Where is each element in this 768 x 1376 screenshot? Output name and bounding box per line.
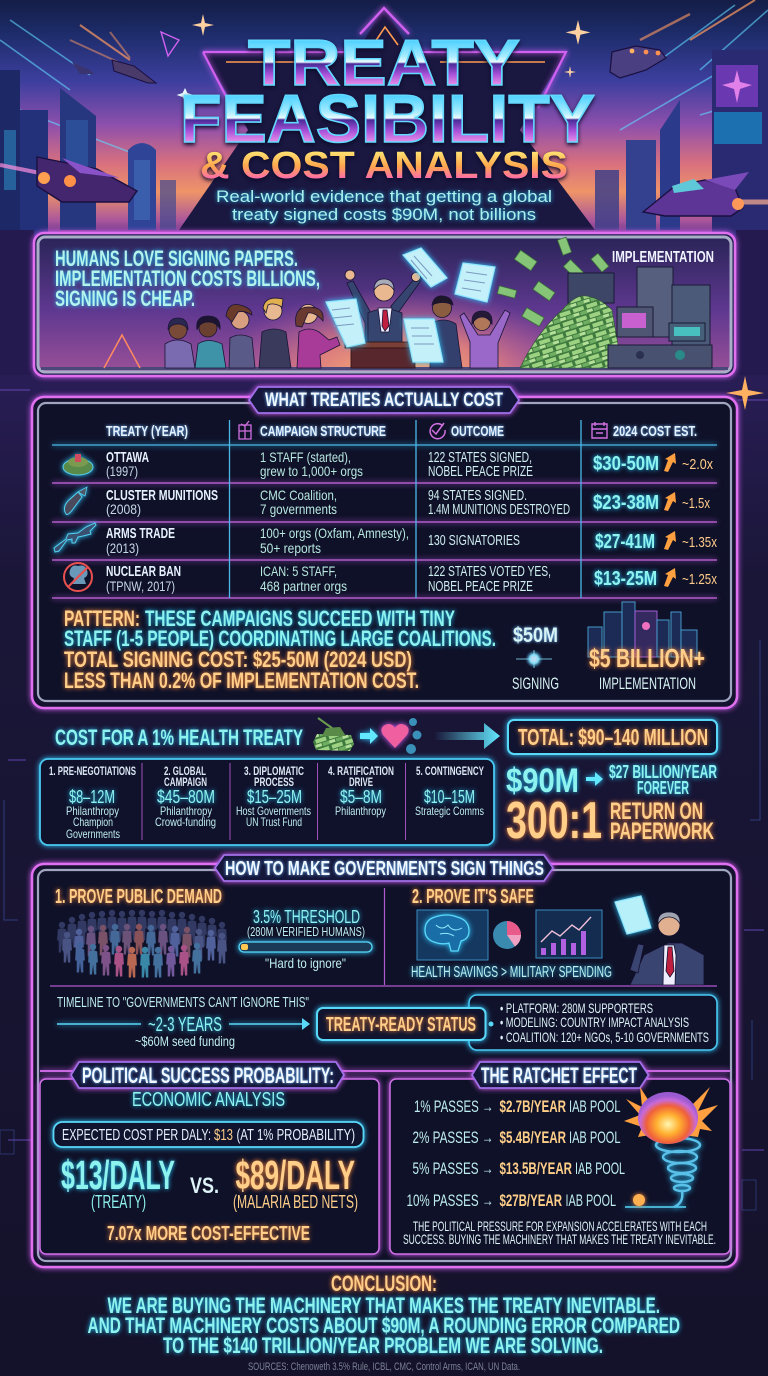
pattern callout: LESS THAN 0.2% OF IMPLEMENTATION COST. [64,668,419,693]
phase 2: global campaign: CAMPAIGN [164,775,207,789]
comparison: signing cost: SIGNING [512,674,559,693]
icon: official with document [615,896,704,985]
row: cluster munitions: 7 governments [260,501,337,517]
spaceship: left small craft [70,32,156,83]
icon: heart with pills [381,718,422,754]
phase 4: ratification drive [328,764,394,818]
heading: cost for a 1% health treaty: COST FOR A 1% HEALTH TREATY [55,725,303,750]
conclusion: CONCLUSION: [331,1271,437,1296]
panel heading [71,1062,344,1088]
pattern callout: PATTERN: [64,606,140,631]
phase 3: diplomatic process: Host Governments [236,804,311,818]
ratchet row 10% [406,1191,616,1210]
ratchet row 2%: 2% PASSES → [412,1128,494,1147]
ratchet row 1%: 1% PASSES → [414,1097,494,1116]
expected cost pill: EXPECTED COST PER DALY: [62,1127,211,1144]
benefit label: HEALTH SAVINGS > MILITARY SPENDING [411,964,612,981]
phase 1: pre-negotiations: Governments [66,827,120,841]
row: cluster munitions: CMC Coalition, [260,487,337,503]
malaria nets cost per daly: $89/DALY [236,1152,355,1198]
ratchet row 2%: IAB POOL [569,1128,620,1147]
return on investment: PAPERWORK [610,818,714,845]
pattern callout: THESE CAMPAIGNS SUCCEED WITH TINY [145,606,455,631]
row: arms trade: (2013) [106,540,139,556]
return on investment: FOREVER [637,778,689,798]
phase 1: pre-negotiations: $8–12M [69,787,115,807]
row: arms trade: 50+ reports [260,540,321,556]
section heading [249,387,519,413]
ratchet row 5%: IAB POOL [575,1159,625,1178]
phase 1: pre-negotiations [49,764,136,841]
hero headline: SIGNING IS CHEAP. [55,286,195,311]
icon: growth arrow [664,492,676,511]
row: arms trade: 100+ orgs (Oxfam, Amnesty), [260,525,409,541]
panel heading: POLITICAL SUCCESS PROBABILITY: [82,1063,334,1088]
treaty-ready status badge: TREATY-READY STATUS [326,1014,476,1036]
row: nuclear ban: NUCLEAR BAN [106,563,181,580]
ratchet row 5%: $13.5B/YEAR [500,1159,572,1178]
podium [345,342,421,368]
ratchet row 2% [412,1128,620,1147]
row: ottawa: (1997) [106,463,138,479]
panel heading: THE RATCHET EFFECT [481,1063,637,1088]
row: ottawa: 122 STATES SIGNED, [428,450,532,466]
title: treaty: TREATY [248,26,520,99]
spaceship: right top craft [610,14,690,78]
malaria nets cost per daly [233,1152,358,1212]
row: arms trade: ARMS TRADE [106,525,175,542]
total box [508,720,717,754]
section heading: HOW TO MAKE GOVERNMENTS SIGN THINGS [225,858,544,880]
title backdrop: neon triangle [161,8,595,230]
scroll text lines [332,256,487,344]
malaria nets cost per daly: (MALARIA BED NETS) [233,1192,358,1212]
phase 1: pre-negotiations: Champion [73,815,113,829]
versus: VS. [190,1173,219,1198]
ratchet row 10%: IAB POOL [566,1191,616,1210]
progress bar [239,942,372,952]
ratchet row 5%: 5% PASSES → [412,1159,494,1178]
icon: pie chart [493,921,521,949]
timeline to treaty-ready: ~$60M seed funding [135,1033,235,1049]
row: cluster munitions: (2008) [106,501,141,517]
crowd illustration [57,910,227,978]
icon: campaign [239,421,251,439]
phase 3: diplomatic process: $15–25M [247,787,302,807]
row: arms trade [54,523,717,556]
comparison: signing cost [512,624,559,693]
table grid [52,420,717,598]
pattern callout: TOTAL SIGNING COST: $25-50M (2024 USD) [64,647,412,672]
comparison: implementation cost: $5 BILLION+ [589,643,705,673]
row: ottawa: NOBEL PEACE PRIZE [428,464,533,480]
phase 2: global campaign: Philanthropy [160,804,212,818]
treaty-ready requirements list: • PLATFORM: 280M SUPPORTERS [500,1000,653,1016]
subtitle [216,187,552,224]
icon: growth arrow [664,568,676,587]
icon: tank on money [313,718,354,751]
row: arms trade: 130 SIGNATORIES [428,533,520,549]
row: nuclear ban: $13-25M [594,568,657,590]
icon: growth arrow [664,453,676,472]
phase 2: global campaign [155,764,216,829]
treaty cost per daly: (TREATY) [91,1192,146,1212]
comparison: signing cost: $50M [513,624,558,647]
implementation label: IMPLEMENTATION [612,249,714,266]
phase 4: ratification drive: 4. RATIFICATION [328,764,394,778]
row: ottawa: ~2.0x [682,456,713,473]
hero headline: HUMANS LOVE SIGNING PAPERS. [55,246,298,271]
row: ottawa: OTTAWA [106,449,149,466]
cost-effectiveness callout: 7.07x MORE COST-EFFECTIVE [107,1223,310,1245]
comparison: implementation cost: IMPLEMENTATION [599,674,696,693]
money pile and machines [520,267,712,368]
conclusion [88,1271,680,1358]
subtitle: treaty signed costs $90M, not billions [232,205,536,224]
treaty-ready status badge [317,1008,494,1040]
table header: CAMPAIGN STRUCTURE [260,423,386,440]
central signer with arms raised [345,270,422,343]
step 1 heading: 1. PROVE PUBLIC DEMAND [55,886,222,908]
timeline to treaty-ready: ~2-3 YEARS [148,1014,222,1036]
phase 2: global campaign: Crowd-funding [155,815,216,829]
phase 5: contingency [415,764,484,818]
ratchet row 1%: IAB POOL [569,1097,620,1116]
icon: banned mushroom cloud [64,563,92,591]
return on investment [506,762,717,850]
row: cluster munitions: ~1.5x [682,495,710,512]
threshold stat [239,907,372,971]
pattern callout [64,606,496,693]
threshold stat: (280M VERIFIED HUMANS) [247,924,365,939]
arrow head [302,1018,310,1030]
table header [106,423,697,440]
phase 5: contingency: Strategic Comms [415,804,484,818]
phase 4: ratification drive: Philanthropy [335,804,386,818]
phase 1: pre-negotiations: Philanthropy [66,804,119,818]
phase 3: diplomatic process: UN Trust Fund [246,815,302,829]
row: arms trade: $27-41M [595,531,655,553]
icon: growth arrow [664,531,676,550]
treaty cost per daly [61,1152,175,1212]
title: feasibility: FEASIBILITY [180,81,595,157]
expected cost pill [54,1122,364,1147]
ratchet row 1% [414,1097,620,1116]
row: nuclear ban: (TPNW, 2017) [106,578,175,594]
phase 5: contingency: 5. CONTINGENCY [416,764,484,778]
phase 4: ratification drive: DRIVE [349,775,373,789]
treaty scrolls [326,248,495,362]
spaceship: left cruiser [0,157,137,202]
arrow: to total [434,723,500,749]
section heading: WHAT TREATIES ACTUALLY COST [265,390,503,411]
ratchet row 10%: 10% PASSES → [406,1191,494,1210]
treaty-ready requirements list [469,995,717,1050]
panel: funding phases [40,759,494,845]
phase 3: diplomatic process: 3. DIPLOMATIC [244,764,304,778]
step 2 heading: 2. PROVE IT'S SAFE [412,886,534,908]
table header: TREATY (YEAR) [106,423,188,440]
icon: brain scan [417,910,488,960]
row: ottawa: $30-50M [593,453,659,475]
phase 2: global campaign: $45–80M [157,787,215,807]
ratchet row 2%: $5.4B/YEAR [500,1128,566,1147]
timeline to treaty-ready: TIMELINE TO "GOVERNMENTS CAN'T IGNORE THIS" [57,994,309,1011]
row: nuclear ban: ~1.25x [682,571,717,588]
icon: calendar [592,422,607,438]
title [180,26,595,187]
decorative sparkles [68,14,764,410]
icon: rifle [54,523,96,552]
title: cost analysis: & COST ANALYSIS [200,145,568,187]
icon: rising bar chart [536,910,602,958]
illustration: spring and explosion [624,1087,718,1207]
row: cluster munitions: CLUSTER MUNITIONS [106,487,218,504]
row: cluster munitions: 1.4M MUNITIONS DESTROYED [428,502,570,518]
ratchet caption [403,1218,716,1247]
arrow: to annual savings [586,772,603,786]
hero headline: IMPLEMENTATION COSTS BILLIONS, [55,266,320,291]
subheading: ECONOMIC ANALYSIS [132,1089,285,1111]
arrow: money to health [360,728,378,744]
return on investment: 300:1 [506,792,602,850]
subtitle: Real-world evidence that getting a global [216,187,552,206]
row: ottawa [63,449,713,480]
expected cost pill: (AT 1% PROBABILITY) [236,1127,355,1144]
treaty cost per daly: $13/DALY [61,1152,175,1198]
flying money [497,237,609,326]
row: ottawa: 1 STAFF (started), [260,449,351,465]
section heading [215,855,553,881]
row: cluster munitions: 94 STATES SIGNED. [428,488,527,504]
hero headline [55,246,320,311]
row: nuclear ban: ICAN: 5 STAFF, [260,563,337,579]
phase 5: contingency: $10–15M [424,787,475,807]
icon: outcome check [430,423,445,439]
phase 4: ratification drive: $5–8M [340,787,382,807]
comparison: implementation cost [588,602,705,693]
row: nuclear ban: NOBEL PEACE PRIZE [428,579,533,595]
row: cluster munitions [64,487,710,518]
phase 3: diplomatic process: PROCESS [254,775,294,789]
phase 1: pre-negotiations: 1. PRE-NEGOTIATIONS [49,764,136,778]
return on investment: $90M [506,762,579,800]
row: cluster munitions: $23-38M [593,492,659,514]
return on investment: RETURN ON [610,798,703,825]
panel: political success probability [40,1062,379,1254]
phase 3: diplomatic process [236,764,311,829]
neon triangle [104,335,140,368]
return on investment: $27 BILLION/YEAR [609,762,717,782]
table header: OUTCOME [451,423,504,440]
threshold stat: 3.5% THRESHOLD [253,907,360,927]
row: nuclear ban [64,563,717,595]
icon: bomb [64,487,87,514]
threshold stat: "Hard to ignore" [265,955,346,971]
icon: landmine [63,454,93,475]
row: ottawa: grew to 1,000+ orgs [260,463,363,479]
ratchet row 1%: $2.7B/YEAR [500,1097,566,1116]
panel: what treaties actually cost [32,387,737,708]
panel: hero signing scene [34,233,735,376]
sources: SOURCES: Chenoweth 3.5% Rule, ICBL, CMC, Control Arms, ICAN, UN Data. [248,1361,520,1373]
panel heading [472,1062,648,1088]
expected cost pill: $13 [214,1127,233,1144]
ratchet row 10%: $27B/YEAR [500,1191,562,1210]
ratchet row 5% [412,1159,625,1178]
panel: how to make governments sign things [32,855,737,1267]
row: arms trade: ~1.35x [682,534,717,551]
timeline to treaty-ready [57,994,310,1049]
table header: 2024 COST EST. [613,423,697,440]
crowd of cheering signers [165,296,510,368]
spaceship: right hover car [643,172,768,216]
icon: neon city [588,602,697,657]
panel: the ratchet effect [390,1062,730,1254]
pattern callout: STAFF (1-5 PEOPLE) COORDINATING LARGE COALITIONS. [64,626,496,651]
phase 2: global campaign: 2. GLOBAL [164,764,206,778]
row: nuclear ban: 122 STATES VOTED YES, [428,564,551,580]
row: nuclear ban: 468 partner orgs [260,578,347,594]
